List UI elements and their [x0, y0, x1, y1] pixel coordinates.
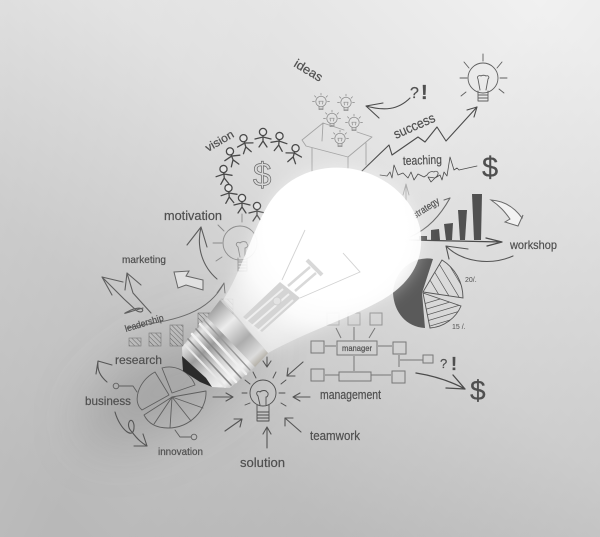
label: management: management	[320, 388, 381, 402]
screw base	[182, 317, 255, 388]
icon: question and exclamation with curved arrow: !	[421, 82, 428, 104]
icon: question and exclamation right	[440, 354, 457, 374]
label: success: success	[391, 110, 438, 142]
arrow: to workshop	[491, 200, 523, 226]
arrow: business loop arrow	[115, 412, 147, 446]
arrows pointing to bulb	[213, 357, 310, 448]
icon: five small idea bulbs	[312, 93, 362, 146]
label: teaching: teaching	[403, 153, 442, 168]
sketch: stick people ring	[204, 128, 304, 221]
chart: leadership bars	[124, 283, 233, 346]
label: strategy: strategy	[411, 196, 442, 222]
chart: strategy bar chart	[403, 184, 557, 261]
label: leadership: leadership	[124, 313, 165, 335]
label: research: research	[115, 353, 162, 367]
pie percent labels: 20/.	[465, 277, 477, 284]
icon: marketing arrows	[102, 273, 151, 313]
sketch drawings	[85, 54, 557, 470]
icon: dollar sign top right: $	[482, 152, 498, 184]
icon: open box	[302, 123, 372, 172]
light bulb	[182, 168, 421, 388]
label: manager: manager	[342, 343, 372, 353]
icon: question and exclamation right: ?	[440, 356, 447, 371]
chart: sketch pie: 15 /.	[452, 324, 466, 331]
label: marketing: marketing	[122, 254, 166, 266]
chart: sketch pie	[393, 258, 476, 329]
bulb cast shadow	[70, 306, 270, 464]
label: innovation: innovation	[158, 446, 203, 458]
arrow: business up arrow	[96, 361, 112, 382]
icon: question and exclamation with curved arrow	[366, 82, 428, 118]
icon: dollar bottom right: $	[470, 375, 486, 406]
arrow: to dollar	[416, 373, 465, 389]
label: workshop: workshop	[509, 238, 557, 252]
icon: faded bulb under motivation	[213, 214, 257, 271]
screw threads	[185, 320, 250, 387]
label: teamwork: teamwork	[310, 429, 361, 443]
chart: exploded pie bottom left	[113, 367, 206, 440]
chart: success growth arrow	[362, 107, 477, 171]
collar	[207, 300, 268, 367]
arrow: workshop back to chart	[446, 246, 513, 261]
label: motivation: motivation	[164, 208, 222, 223]
chart: org chart	[311, 313, 433, 383]
arrow: motivation curved arrow	[187, 227, 217, 279]
filament	[243, 230, 360, 332]
icon: large light bulb top right	[460, 54, 507, 101]
label: business: business	[85, 394, 131, 408]
label: vision: vision	[204, 129, 236, 155]
glass	[223, 168, 421, 353]
bulb glow	[226, 170, 419, 350]
label: ideas: ideas	[291, 57, 325, 85]
label: solution: solution	[240, 456, 285, 470]
bars	[419, 194, 482, 240]
icon: question and exclamation right: !	[451, 354, 457, 374]
chart: heartbeat line	[380, 157, 477, 182]
icon: solution bulb with arrows	[213, 357, 310, 470]
icon: question and exclamation with curved arrow: ?	[410, 85, 419, 102]
arrow: block arrow	[174, 271, 203, 290]
black contact	[182, 356, 212, 387]
icon: dollar in ring: $	[253, 156, 271, 193]
sketch: ideas box	[291, 57, 372, 172]
